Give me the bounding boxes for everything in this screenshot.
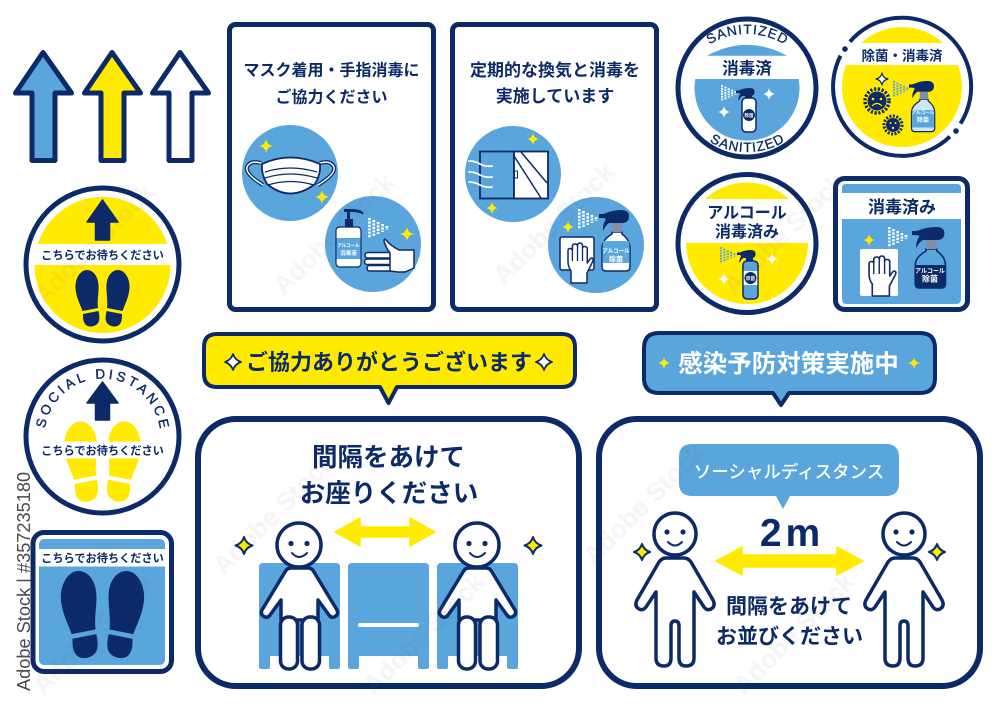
heading: 間隔をあけて bbox=[312, 444, 465, 472]
sticker: sterilized yellow circle with virus: 除菌・消毒済 bbox=[862, 48, 943, 64]
panel: sit apart bbox=[198, 419, 579, 686]
icon: spray and wiping glove bbox=[548, 197, 644, 293]
stock watermarks: Adobe Stock bbox=[207, 446, 341, 580]
sticker: alcohol disinfected yellow circle: 消毒済み bbox=[715, 222, 779, 241]
stock watermarks: Adobe Stock bbox=[717, 166, 851, 300]
seats bbox=[259, 563, 518, 669]
arrow: yellow bbox=[84, 52, 140, 160]
sticker: disinfected square bbox=[836, 178, 968, 310]
sticker: sanitized blue circle: 除菌 bbox=[744, 112, 754, 119]
panel: mask and hand disinfection bbox=[230, 24, 434, 310]
arrows group bbox=[16, 52, 208, 160]
speech bubble: infection prevention: 感染予防対策実施中 bbox=[678, 350, 899, 378]
sticker: disinfected square: アルコール bbox=[915, 268, 945, 275]
sticker: sanitized blue circle: SANITIZED bbox=[706, 24, 788, 44]
stock watermarks bbox=[27, 156, 861, 700]
speech bubble: thanks: ご協力ありがとうございます bbox=[246, 350, 532, 375]
icon: hand sanitizer and hand bbox=[325, 196, 421, 292]
icon: spray and wiping glove: 除菌 bbox=[609, 254, 623, 264]
sticker: sterilized yellow circle with virus: アルコール bbox=[912, 110, 935, 116]
icon: window bbox=[465, 126, 561, 222]
speech bubble: thanks bbox=[204, 334, 575, 403]
person: right seated bbox=[439, 523, 516, 669]
floor sign: blue square: こちらでお待ちください bbox=[41, 551, 164, 565]
arrow: double yellow bbox=[716, 547, 863, 575]
heading: ご協力ください bbox=[275, 88, 388, 106]
person: right standing bbox=[865, 513, 943, 666]
floor sign: social distance circle: こちらでお待ちください bbox=[41, 444, 164, 458]
sticker: alcohol disinfected yellow circle: 除菌 bbox=[746, 275, 755, 282]
stock watermarks: Adobe Stock bbox=[727, 566, 861, 700]
icon: mask bbox=[242, 125, 338, 221]
panel: social distance 2m bbox=[599, 419, 980, 686]
icon: spray and wiping glove: アルコール bbox=[602, 248, 630, 255]
watermark id text: Adobe Stock | #357235180 bbox=[14, 472, 34, 691]
sign text: こちらでお待ちください bbox=[41, 248, 164, 262]
floor sign: blue square bbox=[33, 532, 172, 672]
person: left seated bbox=[261, 523, 338, 669]
sticker: alcohol disinfected yellow circle: アルコール bbox=[707, 205, 787, 222]
icon: big virus bbox=[865, 89, 889, 113]
sticker: alcohol disinfected yellow circle bbox=[678, 174, 816, 312]
callout: ソーシャルディスタンス bbox=[694, 462, 884, 482]
sticker: sterilized yellow circle with virus: 除菌 bbox=[917, 116, 929, 124]
sticker: sterilized yellow circle with virus bbox=[833, 18, 971, 156]
icon: hand sanitizer and hand: 消毒液 bbox=[340, 249, 357, 257]
sticker: sanitized blue circle bbox=[676, 16, 818, 160]
icon: small virus bbox=[884, 116, 902, 134]
floor sign: social distance circle bbox=[24, 358, 182, 516]
heading: 定期的な換気と消毒を bbox=[470, 61, 640, 80]
icon: hand sanitizer and hand: アルコール bbox=[337, 243, 360, 249]
heading: お座りください bbox=[300, 480, 478, 508]
footprints bbox=[75, 270, 130, 327]
floor sign: social distance circle: SOCIAL DISTANCE bbox=[36, 369, 170, 428]
heading: マスク着用・手指消毒に bbox=[243, 60, 420, 80]
arrow: double yellow bbox=[335, 518, 435, 546]
floor sign: yellow circle wait here bbox=[26, 188, 179, 341]
sticker: disinfected square: 消毒済み bbox=[868, 198, 936, 217]
distance value: 2m bbox=[760, 512, 824, 555]
arrow: blue bbox=[16, 52, 72, 160]
stock watermarks: Adobe Stock bbox=[267, 166, 401, 300]
sticker: sanitized blue circle: SANITIZED bbox=[710, 134, 783, 152]
sticker: sanitized blue circle: 消毒済 bbox=[722, 59, 772, 78]
stock watermarks: Adobe Stock bbox=[577, 436, 711, 570]
stock watermarks: Adobe Stock bbox=[27, 566, 161, 700]
stock watermarks: Adobe Stock bbox=[357, 566, 491, 700]
person: left standing bbox=[636, 513, 714, 666]
panel: ventilation and disinfection bbox=[452, 24, 656, 310]
speech bubble: infection prevention bbox=[644, 333, 935, 405]
stock watermarks: Adobe Stock bbox=[487, 156, 621, 290]
stock watermarks: Adobe Stock bbox=[27, 176, 161, 310]
sticker: disinfected square: 除菌 bbox=[922, 274, 938, 284]
text: 間隔をあけて bbox=[726, 596, 852, 618]
arrow: white bbox=[152, 52, 208, 160]
heading: 実施しています bbox=[496, 87, 614, 106]
text: お並びください bbox=[716, 626, 863, 648]
callout bbox=[679, 444, 899, 509]
